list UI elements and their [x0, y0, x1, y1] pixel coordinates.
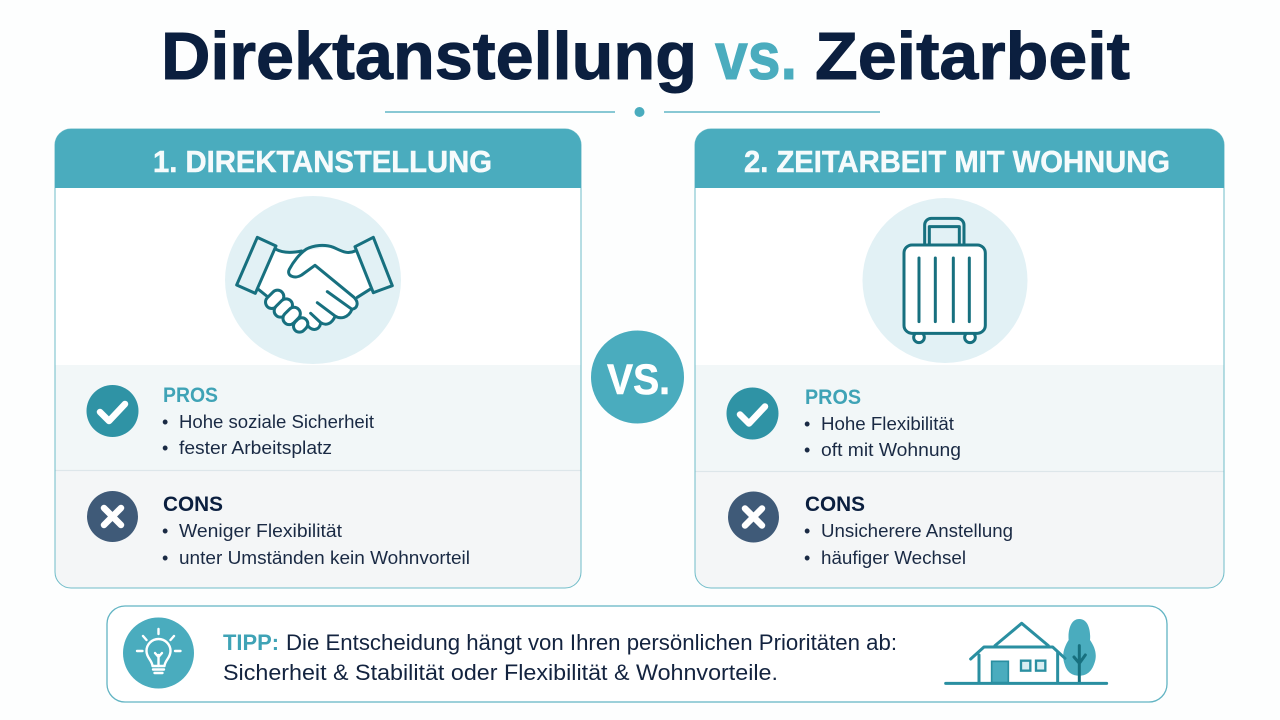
pros list: •: [804, 414, 810, 434]
cons list: •: [162, 521, 168, 541]
tip text: TIPP:: [223, 630, 279, 655]
pros: Direktanstellung: [86, 384, 374, 458]
title: Direktanstellung: [161, 19, 697, 94]
cons list: CONS: [163, 493, 223, 516]
title: [161, 19, 1130, 94]
panel heading: [695, 129, 1224, 188]
pros list: oft mit Wohnung: [821, 440, 961, 460]
tip text: Die Entscheidung hängt von Ihren persönlichen Prioritäten ab:: [286, 630, 897, 655]
pros list: •: [162, 412, 168, 432]
icon: cross: [728, 492, 779, 542]
cons list: CONS: [805, 493, 865, 516]
panel heading: [55, 129, 581, 188]
icon: suitcase: [862, 198, 1028, 363]
cons list: unter Umständen kein Wohnvorteil: [179, 548, 470, 568]
cons: Zeitarbeit: [728, 492, 1013, 568]
cons list: Weniger Flexibilität: [179, 521, 342, 541]
title: vs.: [715, 19, 797, 94]
tip text: [223, 630, 897, 685]
panel heading: 1. DIREKTANSTELLUNG: [153, 144, 492, 179]
panel: Zeitarbeit mit Wohnung: [695, 129, 1224, 588]
panel: Direktanstellung: [55, 129, 581, 588]
icon: check: [726, 388, 778, 440]
pros list: fester Arbeitsplatz: [179, 438, 332, 458]
pros list: [804, 386, 961, 460]
tip text: Sicherheit & Stabilität oder Flexibilität & Wohnvorteile.: [223, 660, 778, 685]
icon: handshake: [225, 196, 401, 364]
cons list: Unsicherere Anstellung: [821, 521, 1013, 541]
pros list: Hohe Flexibilität: [821, 414, 954, 434]
cons list: •: [804, 521, 810, 541]
cons: Direktanstellung: [87, 491, 470, 568]
pros list: PROS: [163, 384, 218, 407]
icon: check: [86, 385, 138, 437]
icon: light bulb: [123, 618, 194, 688]
pros list: •: [804, 440, 810, 460]
pros list: Hohe soziale Sicherheit: [179, 412, 374, 432]
badge: VS.: VS.: [607, 356, 670, 404]
cons list: häufiger Wechsel: [821, 548, 966, 568]
icon: cross: [87, 491, 138, 542]
pros list: [162, 384, 374, 458]
pros: Zeitarbeit: [726, 386, 961, 460]
panel heading: 2. ZEITARBEIT MIT WOHNUNG: [744, 144, 1170, 179]
cons list: [162, 493, 470, 568]
cons list: •: [804, 548, 810, 568]
pros list: PROS: [805, 386, 861, 409]
cons list: •: [162, 548, 168, 568]
badge: VS.: [591, 330, 684, 424]
title: Zeitarbeit: [815, 19, 1130, 94]
cons list: [804, 493, 1013, 568]
pros list: •: [162, 438, 168, 458]
icon: house and tree: [946, 619, 1107, 683]
callout: Tipp: [107, 606, 1167, 702]
